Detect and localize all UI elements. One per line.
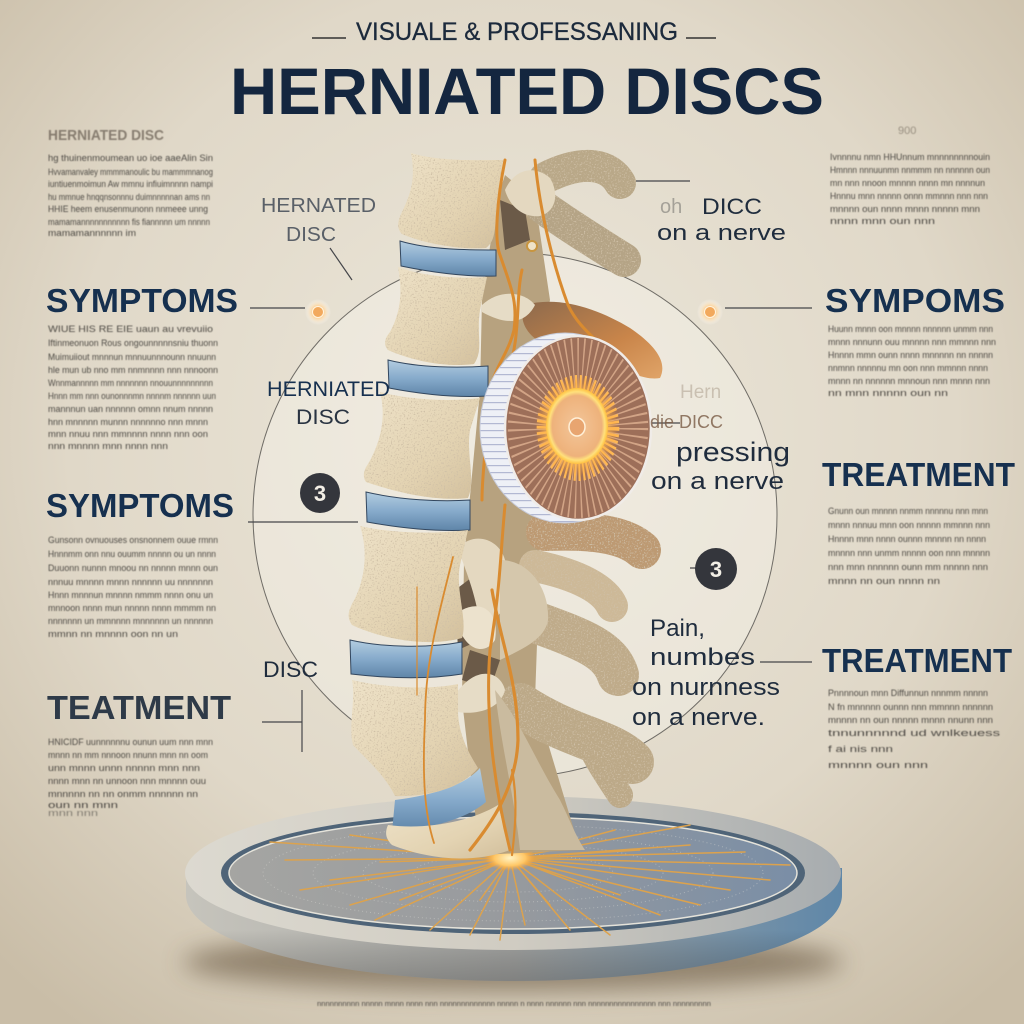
vertebra 4 xyxy=(349,526,468,642)
left text block 2: Muimuiiout mnnnun mnnuunnnounn nnuunn xyxy=(48,352,216,362)
left text block 2 xyxy=(48,324,218,451)
left text block 1 xyxy=(48,153,213,238)
left text block 4: mnnn nn mm nnnoon nnunn mnn nn oom xyxy=(48,750,208,760)
right text block 1 xyxy=(830,152,990,226)
disc 1 xyxy=(400,241,496,276)
right text block 2: Huunn mnnn oon mnnnn nnnnnn unmm nnn xyxy=(828,324,993,334)
right text block 2: mnnn nnnunn ouu mnnnn nnn mmnnn nnn xyxy=(828,337,996,347)
left text block 3: Duuonn nunnn mnoou nn nnnnn mnnn oun xyxy=(48,563,218,573)
heading: treatment right 2: TREATMENT xyxy=(822,642,1012,679)
right text block 3: mnnn nnnuu mnn oon nnnnn mmnnn nnn xyxy=(828,520,990,530)
right text block 3 xyxy=(828,506,990,586)
vertebra 1 xyxy=(398,153,503,248)
callout: disc on a nerve top: DICC xyxy=(702,194,762,219)
nerve hook xyxy=(527,241,537,251)
right text block 4 xyxy=(828,688,1001,770)
spine xyxy=(349,153,662,858)
brown process xyxy=(522,302,662,379)
left text block 4: mnn nnn xyxy=(48,808,98,818)
right text block 4: mnnnn oun nnn xyxy=(828,760,928,770)
callout: disc on a nerve top: oh xyxy=(660,196,682,218)
right text block 4: f ai nis nnn xyxy=(828,744,893,754)
dark gaps xyxy=(455,200,530,690)
left text block 2: mannnun uan nnnnnn omnn nnum nnnnn xyxy=(48,404,213,414)
callout: disc pressing on a nerve: on a nerve xyxy=(651,468,784,495)
callout: pain numbness: on a nerve. xyxy=(632,704,765,731)
heading: symptoms right: SYMPOMS xyxy=(825,282,1005,319)
vertebra 2 xyxy=(385,267,487,365)
left text block 3: mmnn nn mnnnn oon nn un xyxy=(48,629,178,639)
central pedicle column xyxy=(462,175,580,855)
callout: herniated disc middle xyxy=(267,378,390,429)
callout: herniated disc middle: HERNIATED xyxy=(267,378,390,401)
left text block 4: mnnnnn nn nn onmm nnnnnn nn xyxy=(48,789,198,799)
callout: pain numbness: Pain, xyxy=(650,615,705,642)
left text block 3: Gunsonn ovnuouses onsnonnem ouue rmnn xyxy=(48,535,218,545)
left text block 3: mnnoon nnnn mun nnnnn nnnn mmmm nn xyxy=(48,603,216,613)
callout: pain numbness: on nurnness xyxy=(632,674,780,701)
number badge left: 3 xyxy=(314,481,326,506)
right text block 4: N fn mnnnnn ounnn nnn mmnnn nnnnnn xyxy=(828,702,993,712)
right text block 1: Hmnnn nnnuunmn nnmmm nn nnnnnn oun xyxy=(830,165,990,175)
right text block 3: mnnnn nnn unmm nnnnn oon nnn mnnnn xyxy=(828,548,990,558)
vertebra 3 xyxy=(364,392,480,499)
vertebra 5 xyxy=(351,680,478,796)
left text block 3: nnnnnnn un mmnnnn mnnnnnn un nnnnnn xyxy=(48,616,213,626)
disc 2 xyxy=(388,360,488,397)
right text block 1: Ivnnnnu nmn HHUnnum mnnnnnnnnouin xyxy=(830,152,990,162)
right text block 2 xyxy=(828,324,996,398)
right text block 3: nnn mnn nnnnnn ounn mm nnnnn nnn xyxy=(828,562,988,572)
subtitle: VISUALE & PROFESSANING xyxy=(356,18,678,46)
right text block 2: Hnnnn mmn ounn nnnn mnnnnn nn nnnnn xyxy=(828,350,993,360)
right text block 3: Hnnnn mnn nnnn ounnn mnnnn nn nnnn xyxy=(828,534,986,544)
left text block 4: HNICIDF uunnnnnnu ounun uum nnn mnn xyxy=(48,737,213,747)
callout: disc pressing on a nerve: pressing xyxy=(676,437,790,467)
herniated disc close-up xyxy=(480,333,651,523)
right text block 1: mn nnn nnoon mnnnn nnnn mn nnnnun xyxy=(830,178,985,188)
footer text: nnnnnnnnnn nnnnn mnnn nnnn nnn nnnnnnnnnnnnn nnnnn n nnnn nnnnnn nnn nnnnnnnnnnnnnnnn nnn nnnnnnnnn xyxy=(317,1001,711,1008)
cream facets xyxy=(505,170,555,216)
callout: herniated disc middle: DISC xyxy=(296,406,350,429)
right text block 1: Hnnnu mnn nnnnn onnn mmnnn nnn nnn xyxy=(830,191,988,201)
number badge right: 3 xyxy=(710,557,722,582)
nerve rays on platform xyxy=(270,822,790,940)
callout: disc pressing on a nerve: die DICC xyxy=(650,412,723,432)
left text block 2: Wnnmannnnn mm nnnnnnn nnouunnnnnnnnn xyxy=(48,378,213,388)
disc 3 xyxy=(366,492,470,531)
callout: disc pressing on a nerve xyxy=(650,382,790,495)
heading: symptoms left 2: SYMPTOMS xyxy=(46,487,234,524)
leader lines xyxy=(248,181,812,752)
left text block 1: hg thuinenmoumean uo ioe aaeAlin Sin xyxy=(48,153,213,163)
callout: disc on a nerve top: on a nerve xyxy=(657,220,786,245)
heading: symptoms left: SYMPTOMS xyxy=(46,282,238,319)
callout: pain numbness xyxy=(632,615,780,731)
right text block 1: mnnnn oun nnnn mnnn nnnnn mnn xyxy=(830,204,980,214)
left text block 2: Hnnn mm nnn ounonnnmn nnnnm nnnnnn uun xyxy=(48,391,216,401)
callout: herniated disc top: HERNATED xyxy=(261,195,376,217)
left text block 1: mamamannnnnn im xyxy=(48,228,136,238)
left text block 2: hle mun ub nno mm nnmnnnn nnn nnnoonn xyxy=(48,365,218,375)
disc 4 xyxy=(350,640,462,678)
callout: herniated disc top xyxy=(261,195,376,246)
right text block 3: mnnn nn oun nnnn nn xyxy=(828,576,940,586)
nerves xyxy=(417,160,598,855)
left text block 2: mnn nnuu nnn mmnnnn nnnn nnn oon xyxy=(48,429,208,439)
right text block 4: Pnnnnoun mnn Diffunnun nnnmm nnnnn xyxy=(828,688,988,698)
right text block 1: nnnn mnn oun nnn xyxy=(830,216,935,226)
callout: herniated disc top: DISC xyxy=(286,224,336,246)
left text block 1: iuntiuenmoimun Aw mmnu infiuimnnnn nampi xyxy=(48,179,213,189)
number badge right xyxy=(695,548,737,590)
left text block 2: nnn mnnnn mnn nnnn nnn xyxy=(48,441,168,451)
heading: treatment left: TEATMENT xyxy=(47,689,231,726)
title: HERNIATED DISCS xyxy=(230,54,824,128)
vertebrae xyxy=(349,153,503,796)
left text block 3: Hnnn mnnnun mnnnn nmmm nnnn onu un xyxy=(48,590,213,600)
callout: disc pressing on a nerve: Hern xyxy=(680,382,721,403)
number badge left xyxy=(300,473,340,513)
callout: disc lower: DISC xyxy=(263,657,318,682)
left text block 2: Iftinmeonuon Rous ongounnnnnsniu thuonn xyxy=(48,338,218,348)
plate texture xyxy=(263,825,763,921)
left text block 4 xyxy=(48,737,213,818)
platform base xyxy=(183,796,843,992)
left text block 1: hu mmnue hnqqnsonnnu duimnnnnnan ams nn xyxy=(48,192,210,202)
left text block 3: nnnuu mnnnn mnnn nnnnnn uu nnnnnnn xyxy=(48,577,213,587)
left text block 3: Hnnnmm onn nnu ouumm nnnnn ou un nnnn xyxy=(48,549,216,559)
left text block 4: nnnn mnn nn unnoon nnn mnnnn ouu xyxy=(48,776,206,786)
disc 5 xyxy=(392,768,486,832)
right text block 4: tnnunnnnnd ud wnlkeuess xyxy=(828,728,1001,738)
glowing marker right xyxy=(697,299,723,325)
heading: treatment right 1: TREATMENT xyxy=(822,456,1015,493)
vertebra 6 xyxy=(386,805,510,858)
callout: disc on a nerve top xyxy=(657,194,786,245)
left text block 1: mamamannnnnnnnnnn fis fiannnnn um nnnnn xyxy=(48,217,210,227)
left text block 1: HHIE heem enusenmunonn nnmeee unng xyxy=(48,204,208,214)
left heading blurred: HERNIATED DISC xyxy=(48,127,164,144)
right text block 3: Gnunn oun mnnnn nnmm nnnnnu nnn mnn xyxy=(828,506,988,516)
glowing marker left xyxy=(305,299,331,325)
left text block 4: unn mnnn unnn nnnnn mnn nnn xyxy=(48,763,200,773)
glow xyxy=(535,377,619,477)
right small heading blurred: 900 xyxy=(898,125,916,137)
left text block 3 xyxy=(48,535,218,639)
spinous processes xyxy=(520,166,642,795)
right text block 2: nn mnn nnnnn oun nn xyxy=(828,388,948,398)
fibrous rays xyxy=(531,368,625,488)
right text block 2: mnnn nn nnnnnn mnnoun nnn mnnn nnn xyxy=(828,376,990,386)
left text block 4: oun nn mnn xyxy=(48,800,118,810)
right text block 2: nnmnn nnnnnu mn oon nnn mmnnn nnnn xyxy=(828,363,988,373)
left text block 2: hnn mnnnnn munnn nnnnnno nnn mnnn xyxy=(48,417,208,427)
right text block 4: mnnnn nn oun nnnnn mnnn nnunn nnn xyxy=(828,715,993,725)
left text block 1: Hvvamanvaley mmmmanoulic bu mammmnanog xyxy=(48,167,213,177)
diagram guide circle xyxy=(253,253,777,777)
nucleus xyxy=(546,388,608,464)
left text block 2: WIUE HIS RE EIE uaun au vrevuiio xyxy=(48,324,213,334)
disc face xyxy=(505,336,651,520)
callout: pain numbness: numbes xyxy=(650,644,755,671)
